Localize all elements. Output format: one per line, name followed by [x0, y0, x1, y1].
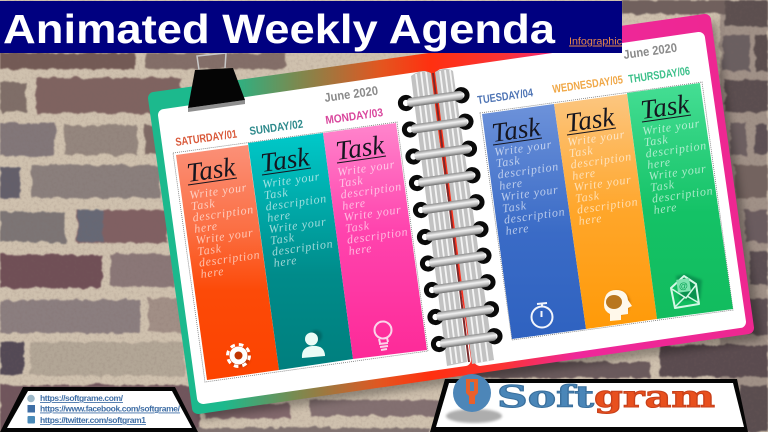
task description: Write your	[195, 225, 254, 247]
back cover	[154, 20, 748, 408]
task description: Task	[643, 132, 669, 149]
task heading: Task	[564, 101, 617, 138]
notebook shadow	[190, 20, 762, 420]
task heading: Task	[185, 151, 238, 188]
task description: here	[578, 211, 603, 228]
left dotted frame	[173, 122, 428, 382]
task heading: Task	[259, 141, 312, 178]
task description: here	[266, 208, 292, 225]
column background	[554, 94, 657, 329]
task description: description	[198, 247, 261, 270]
task description: Task	[501, 198, 527, 215]
task description: here	[653, 200, 678, 217]
right dotted frame	[480, 82, 733, 340]
icon: envelope: @	[679, 281, 688, 291]
task description: Task	[495, 153, 521, 170]
binder clip	[188, 53, 245, 112]
icon: brain head	[604, 290, 632, 321]
left month label: June 2020	[323, 84, 379, 105]
task description: description	[576, 194, 639, 217]
task underline	[337, 156, 386, 163]
notebook	[154, 20, 762, 420]
task description: description	[570, 149, 633, 172]
task underline	[188, 178, 237, 185]
task description: here	[498, 176, 524, 193]
task description: description	[192, 202, 255, 225]
task description: Task	[344, 218, 370, 235]
icon: twitter	[28, 416, 35, 424]
title: Animated Weekly Agenda	[3, 6, 556, 52]
day label: MONDAY/03	[325, 107, 384, 127]
task description: here	[348, 241, 373, 258]
twitter link: https://twitter.com/softgram1	[40, 415, 146, 425]
task description: description	[645, 138, 708, 161]
icon: facebook	[28, 405, 35, 412]
icon: stopwatch	[532, 303, 552, 328]
task description: here	[505, 221, 530, 238]
task description: Write your	[493, 137, 553, 159]
task description: here	[341, 196, 367, 213]
task underline	[262, 168, 311, 175]
task description: Task	[190, 196, 216, 213]
logo box	[430, 374, 748, 432]
day label: SUNDAY/02	[249, 119, 304, 138]
task description: here	[200, 264, 225, 281]
task description: Write your	[641, 116, 701, 138]
logo badge	[453, 374, 491, 412]
icon: globe	[27, 395, 35, 402]
left page	[164, 77, 465, 398]
day label: SATURDAY/01	[175, 128, 238, 149]
task description: here	[273, 253, 298, 270]
column: Sunday	[248, 119, 353, 370]
title banner	[0, 1, 622, 53]
task description: Task	[338, 173, 364, 190]
task underline	[567, 128, 616, 135]
task description: Write your	[648, 161, 707, 183]
logo shadow	[446, 409, 502, 423]
right page	[442, 38, 740, 360]
task description: description	[271, 236, 334, 259]
task description: Write your	[343, 202, 402, 224]
page stack at the spine	[411, 69, 494, 366]
website link: https://softgrame.com/	[40, 393, 124, 403]
task description: Task	[263, 185, 289, 202]
column: Thursday	[627, 65, 733, 319]
task description: Task	[568, 143, 594, 160]
day label: TUESDAY/04	[477, 87, 534, 107]
task description: Task	[574, 188, 600, 205]
task heading: Task	[334, 129, 387, 166]
column background	[176, 145, 279, 380]
task description: here	[193, 219, 219, 236]
task heading: Task	[490, 111, 543, 148]
task description: here	[571, 166, 597, 183]
infographic tag: Infographic	[569, 36, 622, 48]
column: Wednesday	[552, 74, 657, 329]
logo wordmark: Soft: Soft	[497, 380, 594, 415]
column background	[248, 133, 353, 370]
task description: description	[497, 159, 560, 182]
facebook link: https://www.facebook.com/softgrame/	[40, 404, 181, 414]
task description: description	[503, 204, 566, 227]
day label: WEDNESDAY/05	[552, 74, 624, 96]
task underline	[493, 138, 542, 145]
icon: gear	[228, 344, 250, 367]
task description: Write your	[268, 214, 327, 236]
icon: light bulb	[374, 322, 392, 350]
task description: Write your	[566, 127, 626, 149]
spiral binding rings	[400, 89, 501, 350]
task description: Write your	[500, 182, 559, 204]
task description: description	[346, 224, 409, 247]
column: Saturday	[175, 128, 279, 380]
task description: Task	[269, 230, 295, 247]
task description: description	[265, 191, 328, 214]
task heading: Task	[639, 88, 692, 125]
column: Monday	[323, 107, 427, 359]
column background	[482, 104, 586, 339]
task description: description	[340, 179, 403, 202]
task description: here	[646, 155, 672, 172]
icon: envelope	[671, 274, 702, 308]
logo wordmark: gram: gram	[594, 380, 715, 415]
column background	[627, 83, 733, 319]
icon: person	[302, 330, 325, 358]
task description: Write your	[573, 172, 632, 194]
task description: Task	[649, 177, 675, 194]
column background	[323, 123, 427, 359]
task description: Write your	[336, 157, 396, 179]
task description: Write your	[188, 180, 248, 202]
social links box	[0, 387, 198, 432]
column: Tuesday	[477, 87, 586, 339]
task description: Write your	[261, 169, 321, 191]
right month label: June 2020	[622, 41, 678, 62]
task description: description	[651, 183, 714, 206]
task description: Task	[196, 241, 222, 258]
day label: THURSDAY/06	[628, 65, 691, 86]
task underline	[642, 115, 691, 122]
